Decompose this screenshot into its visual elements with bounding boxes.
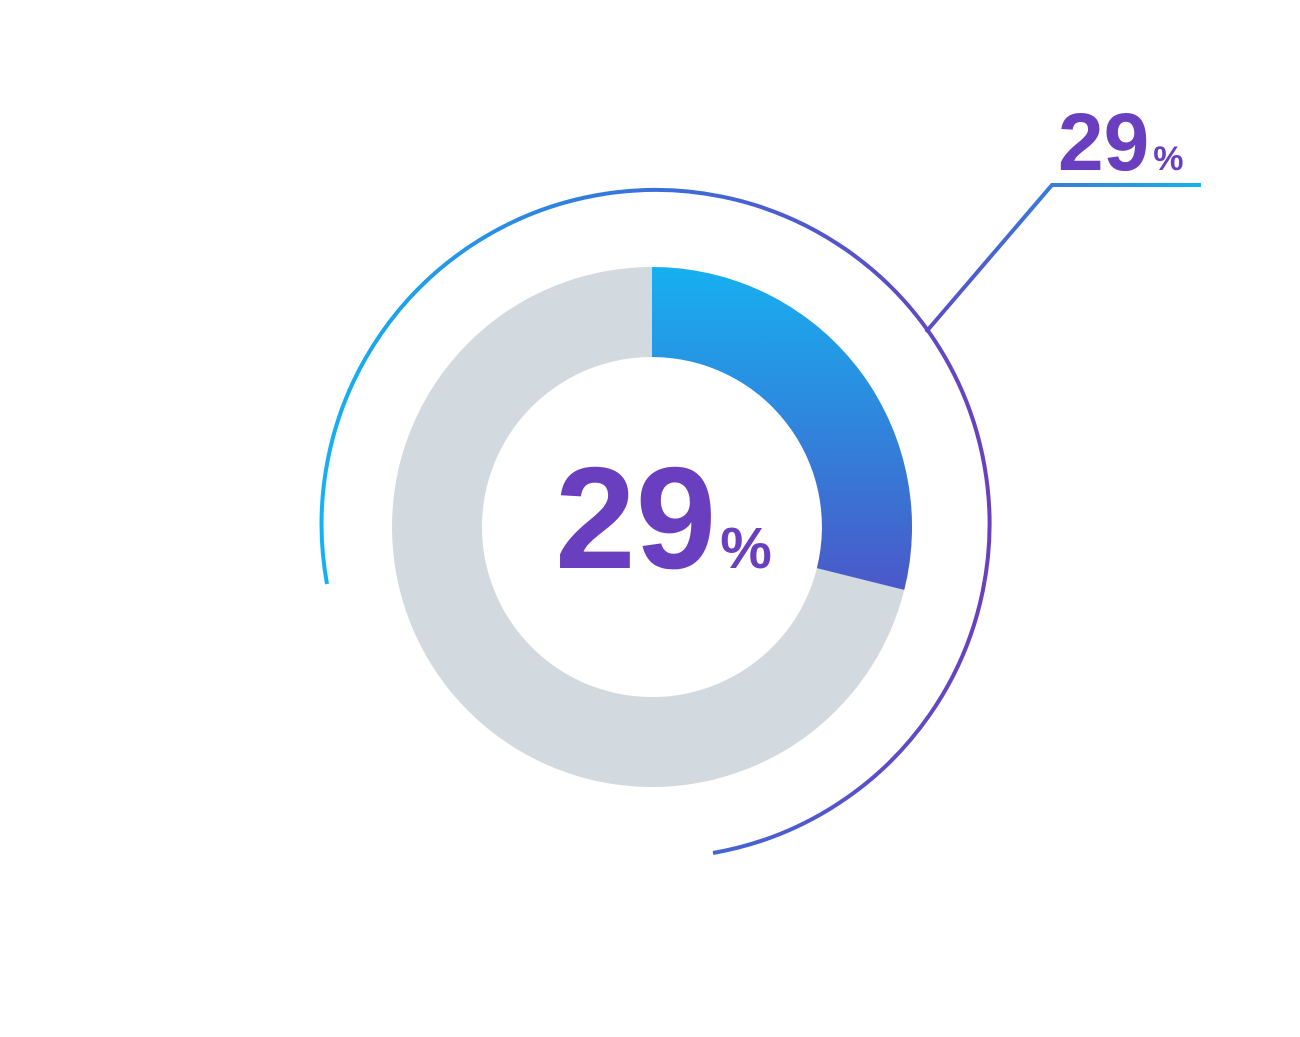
center value: 29% (555, 437, 772, 599)
donut background ring (437, 312, 867, 742)
donut chart (437, 267, 912, 742)
leader line (926, 185, 1201, 332)
callout label: 29% (1058, 97, 1183, 188)
outer arc (322, 190, 990, 853)
donut segment 29% (652, 267, 912, 590)
